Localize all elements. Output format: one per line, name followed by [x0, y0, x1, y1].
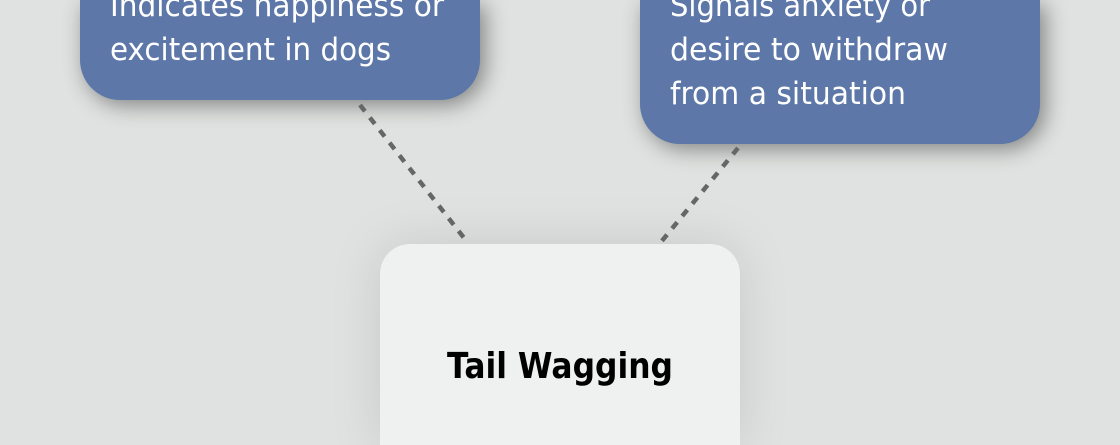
text: anxiety description [670, 0, 948, 112]
connector: left card to Tail Wagging [360, 105, 468, 243]
panel: happiness card [80, 0, 480, 100]
connector: right card to Tail Wagging [661, 148, 738, 242]
text: happiness description: excitement in dogs [110, 32, 391, 68]
text: anxiety description: from a situation [670, 76, 906, 112]
text: anxiety description: desire to withdraw [670, 32, 948, 68]
text: happiness description [110, 0, 444, 68]
panel: anxiety card [640, 0, 1040, 144]
panel: Tail Wagging card [380, 244, 740, 445]
heading: Tail Wagging: Tail Wagging [447, 346, 673, 387]
